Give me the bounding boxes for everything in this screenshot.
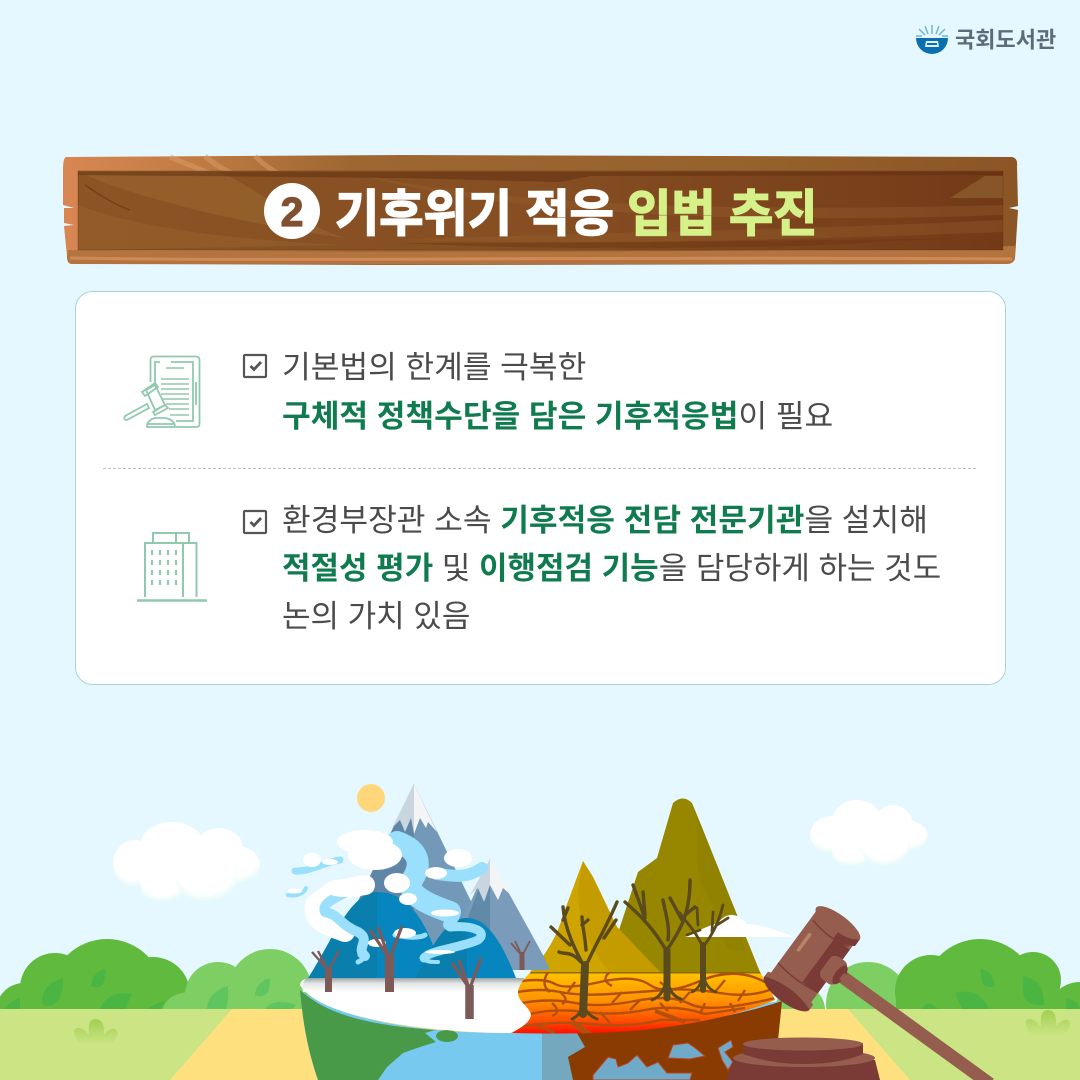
panel: content card [76, 292, 1006, 684]
wooden sign banner [63, 155, 1018, 265]
title: number badge [264, 183, 320, 239]
cracked lava surface [512, 972, 775, 1035]
title: number badge: 2 [281, 189, 303, 235]
gavel block [727, 1038, 880, 1080]
checkbox 1 [244, 355, 266, 377]
snow surface [300, 978, 531, 1033]
sprout left [74, 1019, 118, 1045]
text block 2: 논의 가치 있음 [282, 599, 470, 634]
logo: National Assembly Library [916, 25, 1056, 54]
logo wordmark: 국회도서관 [955, 28, 1056, 52]
snow caps [392, 784, 414, 834]
checkbox 2 [244, 511, 266, 533]
blue-grey mountains [330, 784, 550, 970]
snow-side bare trees [312, 926, 530, 1019]
text block 1 [282, 350, 833, 434]
gavel head [764, 906, 860, 1012]
blue hills [307, 892, 518, 983]
icon: law document and gavel [124, 356, 200, 427]
icon: building [137, 533, 207, 600]
icon: open book with rays [916, 25, 948, 54]
text block 1: 기본법의 한계를 극복한 [282, 350, 586, 385]
ice clouds and stream [288, 830, 482, 962]
ground [0, 1009, 1080, 1080]
bushes left [0, 939, 320, 1053]
title heading: 기후위기 적응 입법 추진 [335, 187, 818, 242]
left white smoke [315, 885, 365, 932]
climate globe illustration [288, 784, 795, 1080]
cloud right [810, 800, 928, 867]
olive mountain [618, 798, 760, 972]
white cloud behind trees [685, 915, 795, 937]
desert dead trees [551, 880, 728, 1019]
green continent and ocean side [300, 990, 782, 1080]
bushes right [775, 939, 1080, 1053]
sprout right [1026, 1010, 1070, 1036]
cloud left [113, 822, 260, 903]
text block 2: 환경부장관 소속 기후적응 전담 전문기관을 설치해 [282, 503, 928, 538]
yellow mountain [530, 861, 660, 972]
text block 2 [282, 503, 941, 634]
text block 1: 구체적 정책수단을 담은 기후적응법이 필요 [282, 399, 833, 434]
sun [357, 784, 385, 812]
brown continent [568, 1001, 782, 1080]
text block 2: 적절성 평가 및 이행점검 기능을 담당하게 하는 것도 [282, 551, 941, 586]
gavel [759, 900, 990, 1080]
gavel handle [833, 970, 990, 1080]
